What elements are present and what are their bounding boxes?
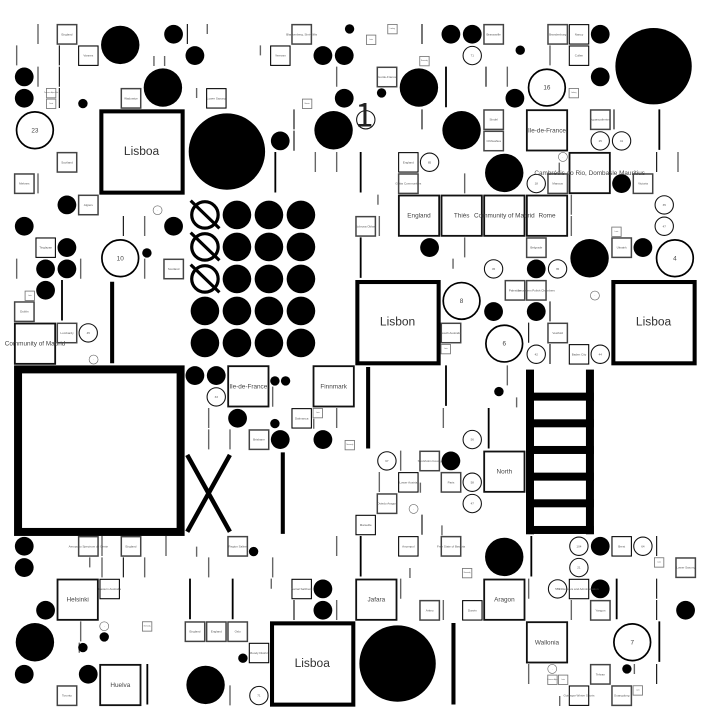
panel: Lisboa right (613, 282, 695, 363)
tick marks: medium (62, 67, 659, 705)
panel: Finnmark (314, 366, 354, 407)
numbered ring 16 (529, 69, 565, 106)
icon: prohibited circles (191, 201, 219, 292)
panel: Jafara (356, 580, 397, 620)
icon: X cross (187, 455, 230, 532)
tick marks: heavy (112, 282, 453, 705)
numbered ring 10 (102, 240, 139, 277)
panel: Ile-de-France (527, 110, 567, 151)
panel: Huelva (100, 665, 141, 705)
panel: Thiès (442, 196, 482, 236)
panel: Helsinki (58, 580, 98, 620)
panel: Community of Madrid (474, 196, 535, 236)
panel: Lisbon centre (357, 282, 439, 363)
ring with large numeral 1: 1 (355, 89, 373, 137)
numbered ring 6 (486, 325, 523, 362)
black dots: tiny (78, 24, 632, 674)
dot matrix (191, 201, 315, 357)
icon: ladder (526, 370, 594, 534)
panel: Aragon (484, 580, 525, 620)
numbered ring 8 (443, 283, 480, 319)
panel: Community of Madrid west (5, 324, 66, 364)
panel: Lisboa bottom (272, 623, 353, 705)
numbered ring 4 (657, 240, 693, 277)
panel: England (399, 196, 439, 236)
panel: North (484, 452, 525, 492)
mini rings (89, 152, 599, 673)
panel: Lisboa top left (101, 111, 183, 193)
panel: Rome (527, 196, 567, 236)
panel: Cambrésis (534, 153, 645, 193)
small numbered rings (79, 46, 673, 705)
panel: large empty square (18, 369, 181, 532)
black dots: large (16, 26, 609, 704)
tick marks: thin black (59, 24, 657, 684)
panel: Ile-de-France centre (228, 366, 269, 407)
numbered ring 23 (17, 112, 53, 149)
black dots: huge (189, 28, 692, 702)
panel: Wallonia (527, 622, 567, 663)
numbered ring 7 (614, 624, 651, 661)
